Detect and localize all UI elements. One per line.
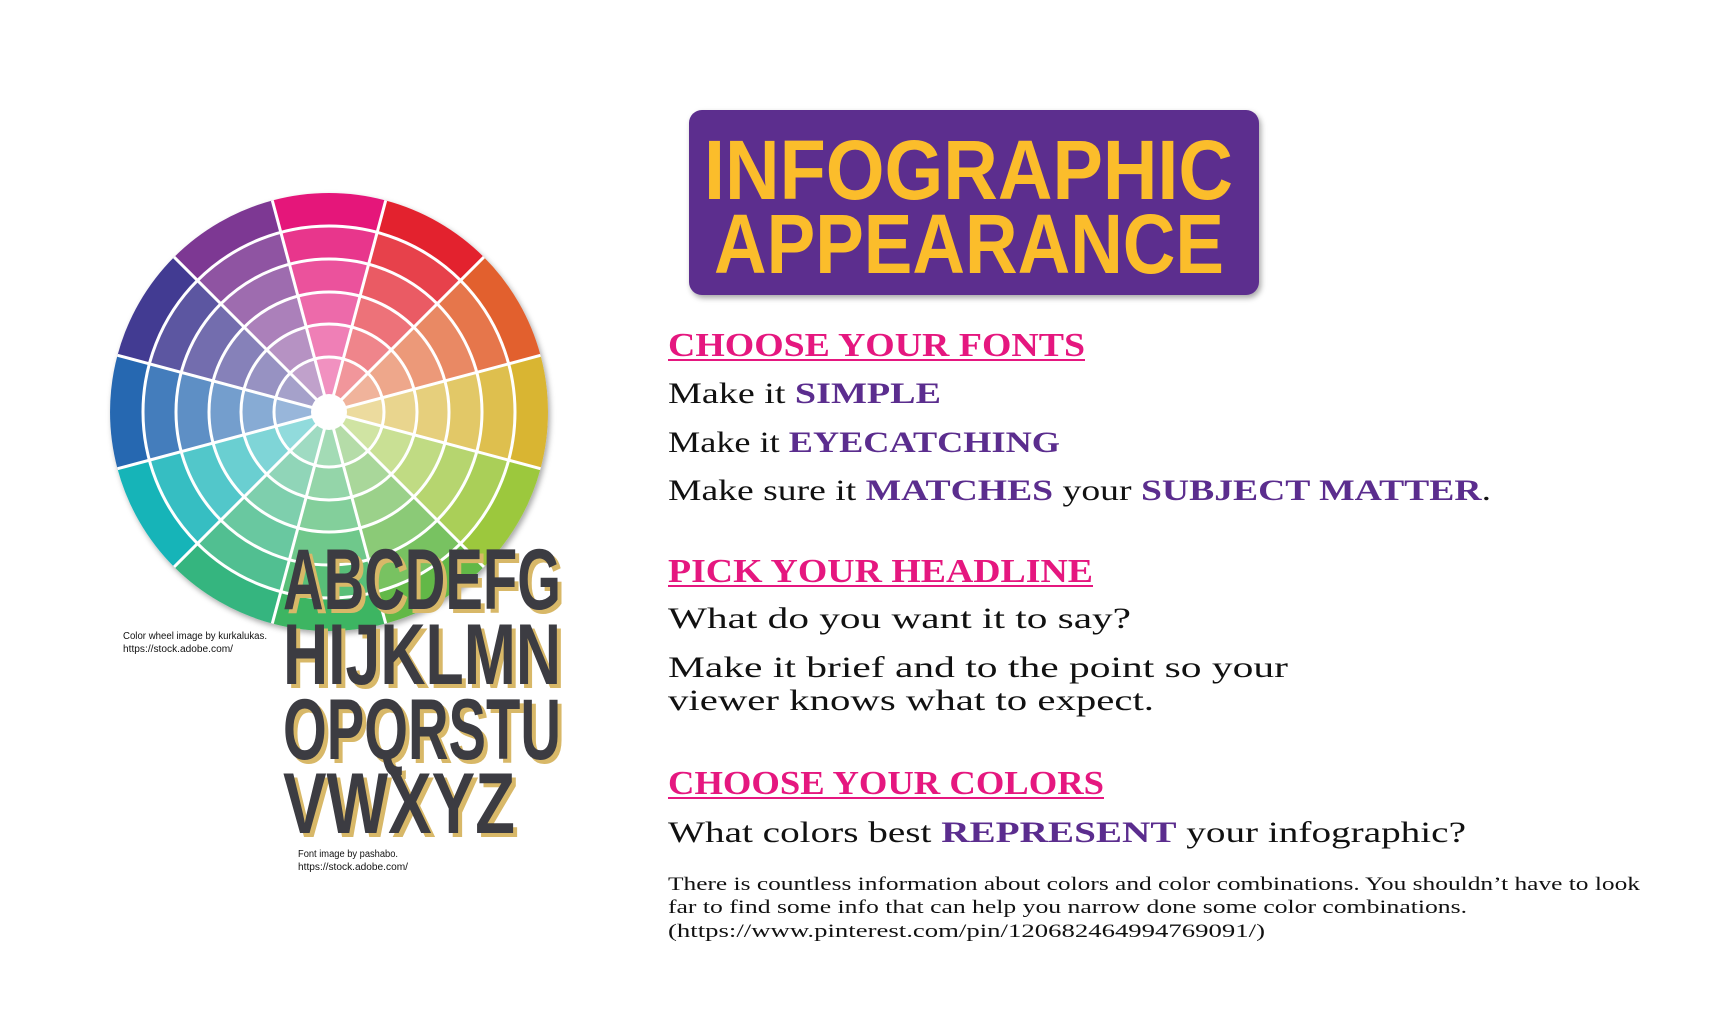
font sample alphabet: VWXYZ: [283, 756, 515, 852]
section: choose your colors: What colors best REPRESENT your infographic?: [668, 816, 1466, 849]
section: pick your headline: viewer knows what to expect.: [668, 684, 1154, 717]
section: pick your headline: Make it brief and to the point so your: [668, 651, 1288, 684]
section: choose your fonts: [668, 327, 1491, 507]
credit: font image: https://stock.adobe.com/: [298, 862, 408, 873]
font sample alphabet: ABCDEFG: [287, 536, 565, 632]
heading: choose your fonts: CHOOSE YOUR FONTS: [668, 327, 1085, 364]
font sample alphabet: OPQRSTU: [287, 686, 565, 782]
credit: color wheel: Color wheel image by kurkalukas.: [123, 631, 267, 642]
credit: color wheel: https://stock.adobe.com/: [123, 644, 233, 655]
section: pick your headline: What do you want it to say?: [668, 602, 1131, 635]
credit: font image: [298, 849, 408, 873]
font sample alphabet: ABCDEFG: [283, 532, 561, 628]
font sample alphabet: HIJKLMN: [283, 607, 561, 703]
credit: color wheel: [123, 631, 267, 655]
note text: far to find some info that can help you narrow done some color combinations.: [668, 897, 1467, 918]
note text: (https://www.pinterest.com/pin/120682464994769091/): [668, 921, 1265, 942]
font sample alphabet: OPQRSTU: [283, 682, 561, 778]
section: choose your fonts: Make it SIMPLE: [668, 377, 941, 410]
section: choose your fonts: Make sure it MATCHES your SUBJECT MATTER .: [668, 474, 1491, 507]
note text: [668, 874, 1641, 942]
heading: pick your headline: PICK YOUR HEADLINE: [668, 553, 1093, 590]
section: choose your fonts: Make it EYECATCHING: [668, 426, 1060, 459]
section: choose your colors: [668, 765, 1641, 942]
font sample alphabet: VWXYZ: [287, 760, 519, 856]
icon: color wheel: [110, 193, 548, 631]
title banner: APPEARANCE: [714, 197, 1224, 291]
note text: There is countless information about colors and color combinations. You shouldn’t have to look: [668, 874, 1641, 895]
heading: choose your colors: CHOOSE YOUR COLORS: [668, 765, 1104, 802]
section: pick your headline: [668, 553, 1288, 717]
title banner: [689, 110, 1259, 295]
title banner: INFOGRAPHIC: [704, 123, 1233, 217]
credit: font image: Font image by pashabo.: [298, 849, 398, 860]
font sample alphabet: HIJKLMN: [287, 611, 565, 707]
font sample alphabet: [283, 532, 565, 856]
